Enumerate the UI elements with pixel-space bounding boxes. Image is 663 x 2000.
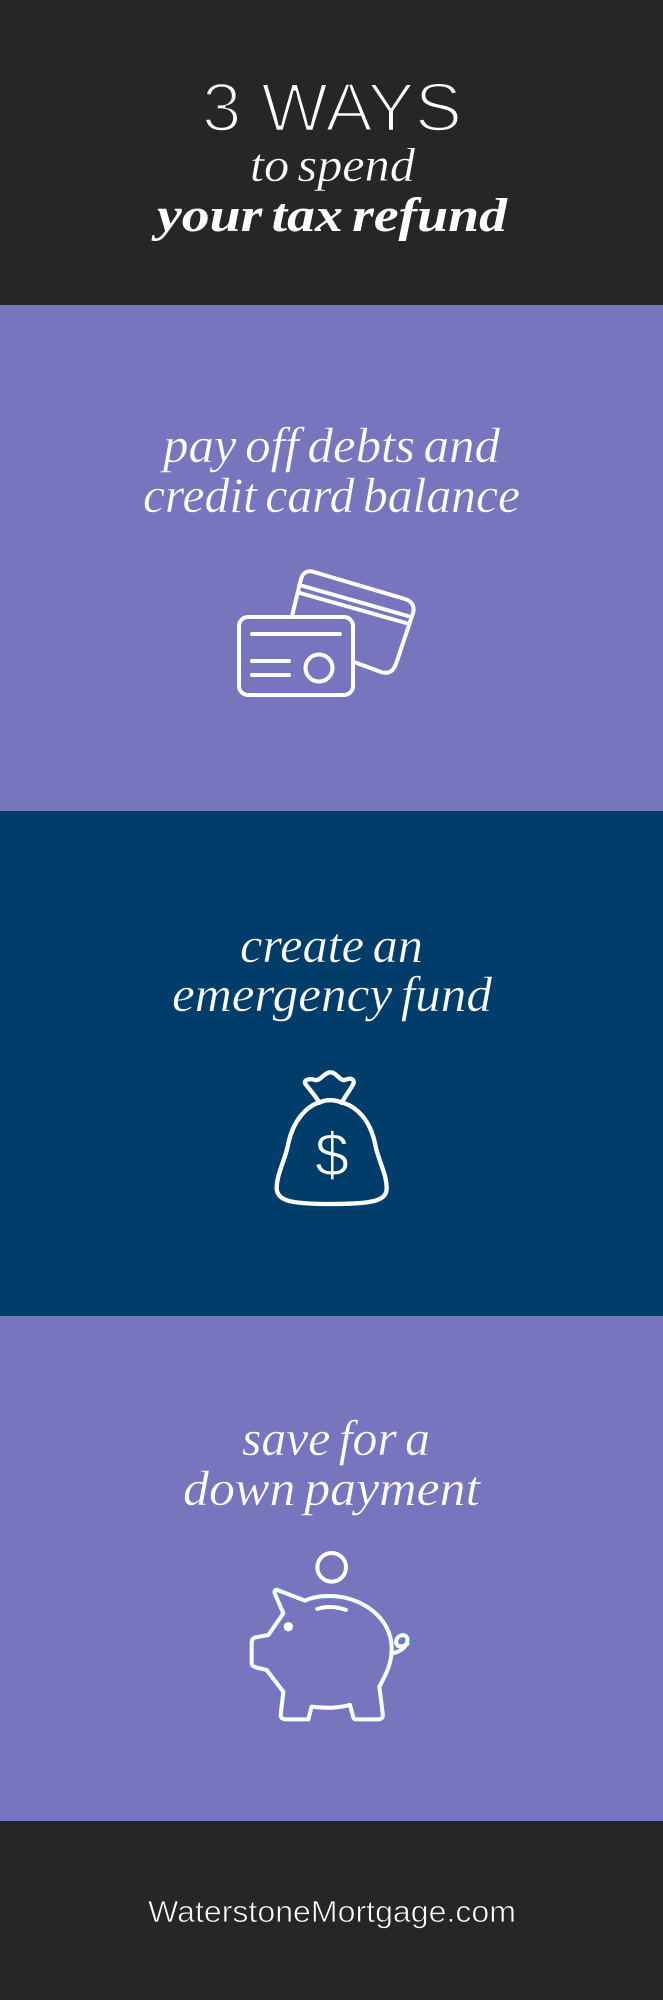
title: 3 WAYS: 3 WAYS: [202, 69, 462, 146]
heading: pay off debts and credit card balance: credit card balance: [143, 467, 520, 523]
panel: header: [0, 0, 663, 305]
footer: website: WaterstoneMortgage.com: [148, 1894, 516, 1929]
heading: save for a down payment: [183, 1410, 481, 1516]
heading: pay off debts and credit card balance: pay off debts and: [160, 417, 501, 473]
panel: down payment: [0, 1316, 663, 1821]
icon: money bag: [277, 1072, 387, 1204]
subtitle: to spend: to spend: [250, 139, 416, 192]
panel: footer: [0, 1821, 663, 2000]
panel: emergency fund: [0, 811, 663, 1316]
heading: create an emergency fund: [172, 917, 493, 1022]
heading: create an emergency fund: emergency fund: [172, 966, 493, 1022]
heading: save for a down payment: save for a: [242, 1410, 430, 1466]
icon: piggy bank: [252, 1553, 411, 1719]
subtitle: your tax refund: your tax refund: [151, 189, 508, 242]
heading: create an emergency fund: create an: [240, 917, 423, 973]
icon: money bag: $: [315, 1121, 349, 1189]
panel: pay off debts: [0, 305, 663, 811]
icon: credit cards: [239, 571, 414, 695]
heading: pay off debts and credit card balance: [143, 417, 520, 523]
heading: save for a down payment: down payment: [183, 1460, 481, 1516]
